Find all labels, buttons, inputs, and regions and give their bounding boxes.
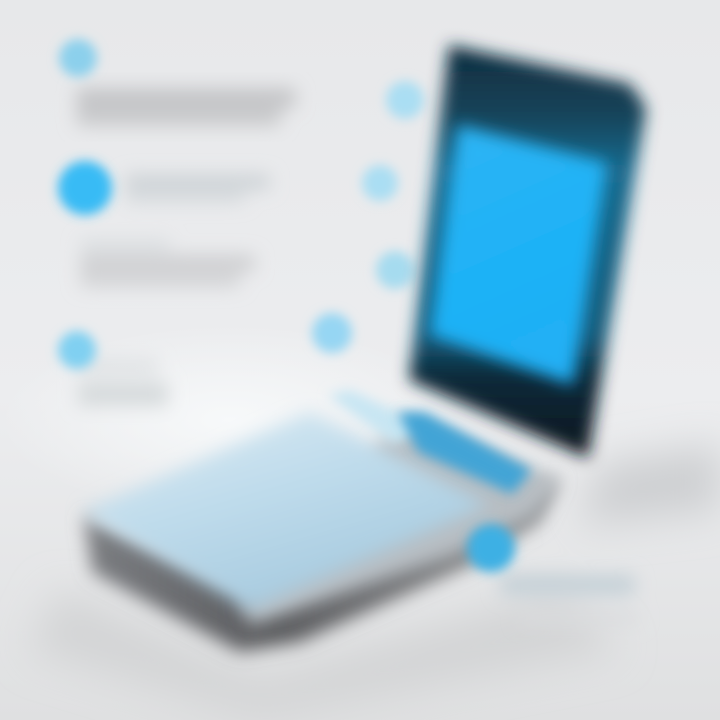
icon: phone bullet 4 [312, 313, 352, 353]
icon: phone bullet 1 [386, 81, 424, 119]
base device side [84, 478, 560, 652]
placeholder text: middle left block [80, 175, 270, 287]
icon: phone bullet 2 [362, 165, 398, 201]
placeholder text: top left block [76, 88, 296, 126]
icon: left bullet 1 [59, 39, 97, 77]
phone body [409, 45, 646, 458]
base device grey edge [240, 420, 560, 625]
background glow [0, 325, 460, 515]
upright phone [409, 45, 646, 458]
floor shadows [30, 445, 720, 720]
icon: bottom bullet [467, 524, 515, 572]
blue hinge strip [398, 412, 532, 494]
icon: left bullet 2 [58, 161, 112, 215]
light hinge strip [328, 390, 425, 445]
base device top [82, 412, 490, 610]
placeholder text: lower left block [78, 360, 168, 406]
icon: left bullet 3 [58, 331, 96, 369]
placeholder text: lower right block [500, 575, 640, 624]
phone screen [430, 125, 607, 385]
icon: phone bullet 3 [376, 251, 414, 289]
base device [82, 390, 560, 652]
